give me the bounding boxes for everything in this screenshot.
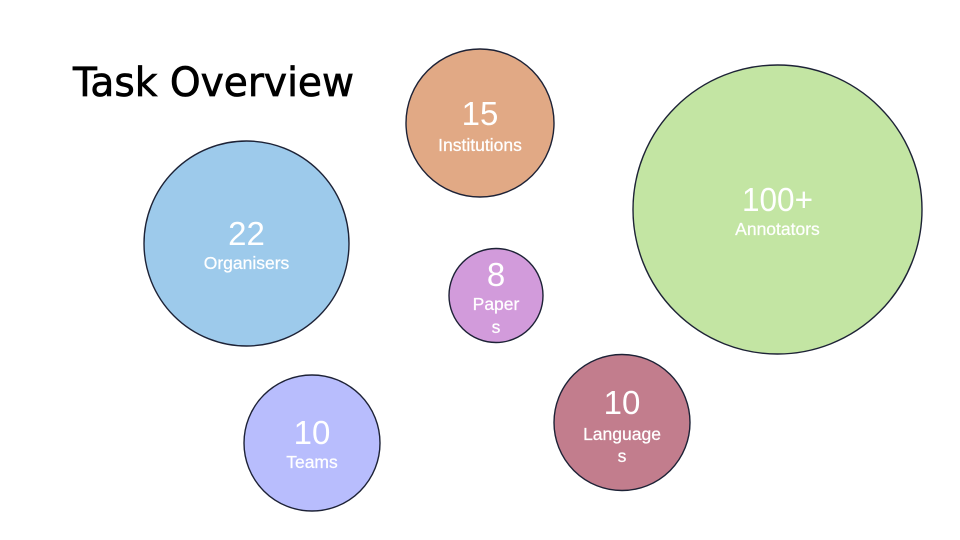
title: Task Overview bbox=[72, 60, 354, 106]
bubble: papers bbox=[449, 248, 543, 342]
bubble: annotators: Annotators bbox=[735, 219, 820, 239]
bubble: papers: 8 bbox=[487, 256, 505, 293]
bubble: papers: Paper bbox=[473, 294, 520, 314]
bubble: institutions: Institutions bbox=[438, 135, 522, 155]
bubble: organisers: 22 bbox=[228, 215, 265, 252]
bubble: teams bbox=[244, 375, 380, 511]
bubble: institutions: 15 bbox=[462, 95, 498, 132]
bubble: organisers bbox=[144, 141, 349, 346]
bubble: institutions bbox=[406, 49, 554, 197]
bubble: papers: s bbox=[492, 317, 501, 337]
bubble: annotators bbox=[633, 65, 922, 354]
bubble: languages: s bbox=[618, 446, 627, 466]
bubble: languages: Language bbox=[583, 424, 661, 444]
bubble: annotators: 100+ bbox=[742, 181, 813, 218]
bubble: teams: 10 bbox=[294, 414, 330, 451]
bubble: languages bbox=[554, 354, 690, 490]
bubble: teams: Teams bbox=[286, 452, 338, 472]
bubble: organisers: Organisers bbox=[204, 253, 290, 273]
bubble: languages: 10 bbox=[604, 384, 640, 421]
